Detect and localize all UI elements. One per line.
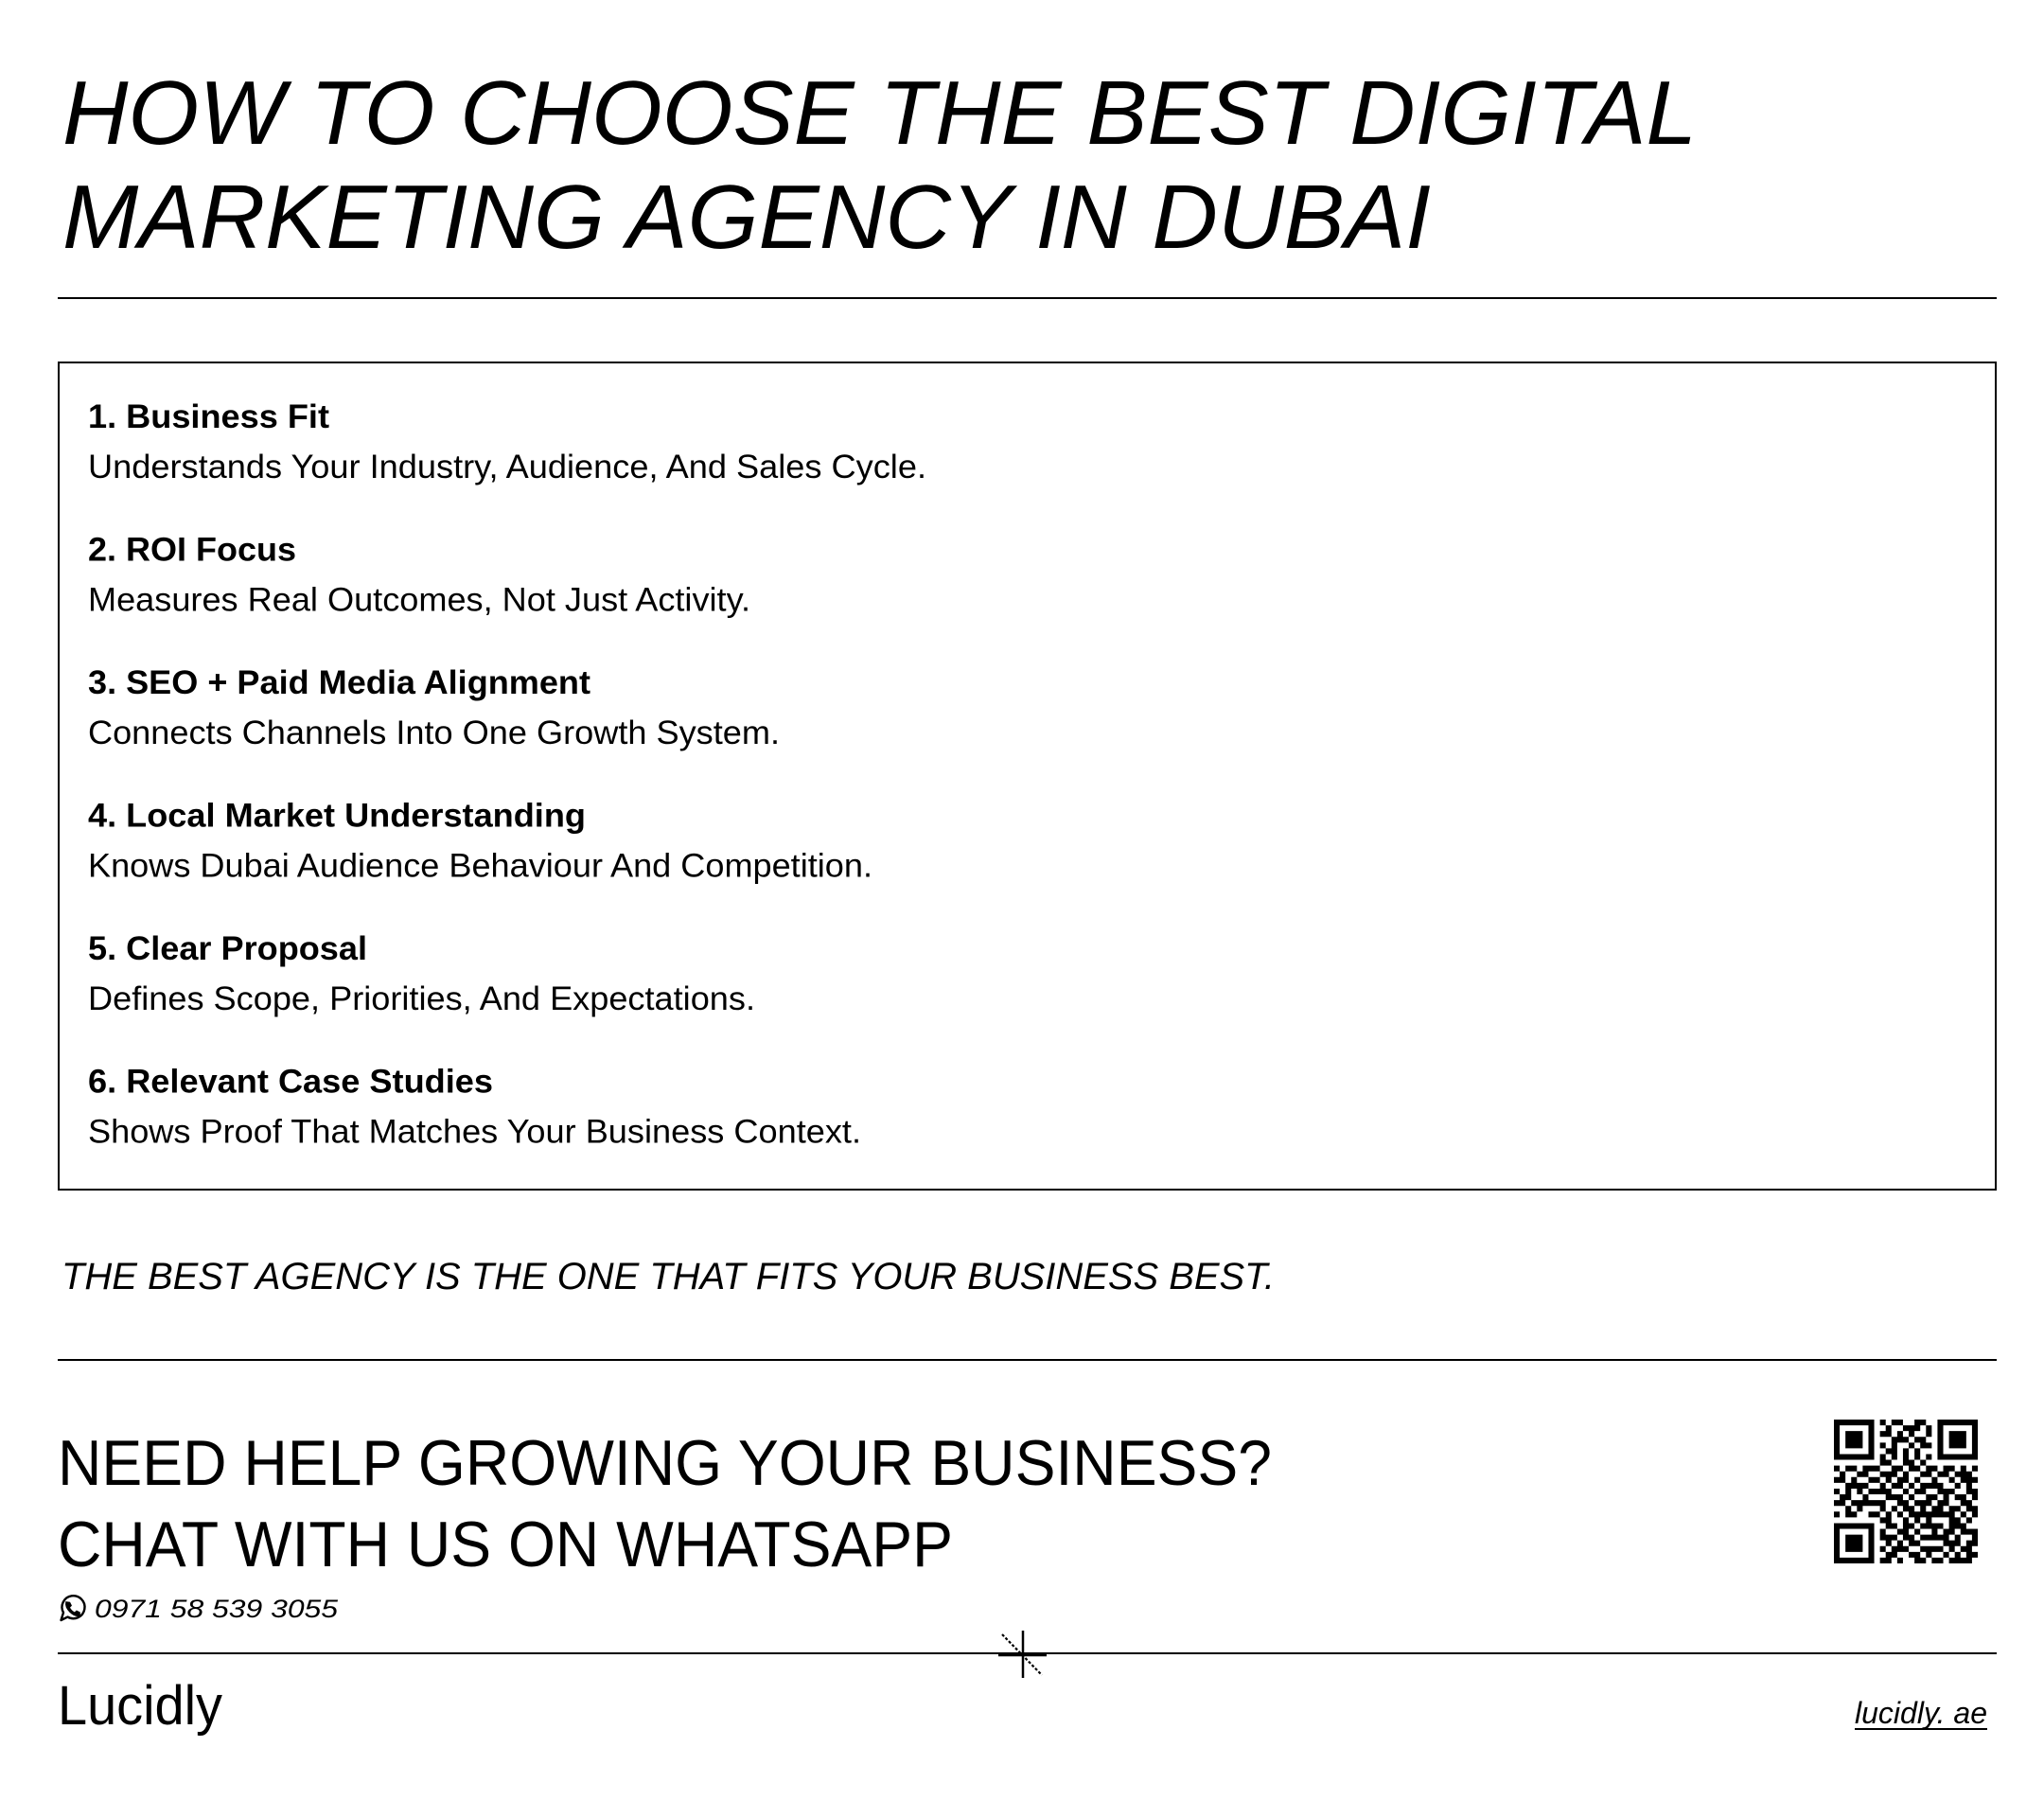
item 3: 3. SEO + Paid Media Alignment <box>88 664 590 701</box>
item 6: Shows Proof That Matches Your Business Context. <box>88 1113 861 1151</box>
item 6: 6. Relevant Case Studies <box>88 1064 493 1100</box>
item 4 <box>88 797 872 884</box>
title: HOW TO CHOOSE THE BEST DIGITAL <box>62 62 1697 164</box>
item 3 <box>88 664 780 751</box>
title: MARKETING AGENCY IN DUBAI <box>62 167 1431 268</box>
item 2: Measures Real Outcomes, Not Just Activity. <box>88 581 750 619</box>
title <box>62 62 1697 268</box>
item 5: 5. Clear Proposal <box>88 930 367 967</box>
phone contact: 0971 58 539 3055 <box>95 1595 339 1623</box>
qr code <box>1834 1422 1978 1561</box>
item 1: 1. Business Fit <box>88 398 329 435</box>
item 2 <box>88 532 750 619</box>
item 4: 4. Local Market Understanding <box>88 797 586 835</box>
item 1 <box>88 398 926 485</box>
call to action <box>58 1427 1272 1580</box>
call to action: NEED HELP GROWING YOUR BUSINESS? <box>58 1427 1272 1499</box>
item 2: 2. ROI Focus <box>88 532 296 568</box>
item 5 <box>88 930 755 1017</box>
icon: whatsapp <box>61 1596 85 1620</box>
logo: Lucidly: Lucidly <box>58 1675 222 1737</box>
panel: criteria list <box>59 362 1996 1190</box>
item 4: Knows Dubai Audience Behaviour And Competition. <box>88 848 872 884</box>
call to action: CHAT WITH US ON WHATSAPP <box>58 1509 953 1580</box>
icon: star cross <box>998 1631 1047 1678</box>
item 6 <box>88 1064 861 1151</box>
item 1: Understands Your Industry, Audience, And Sales Cycle. <box>88 449 926 485</box>
website link: lucidly. ae <box>1855 1696 1987 1730</box>
tagline: THE BEST AGENCY IS THE ONE THAT FITS YOUR BUSINESS BEST. <box>62 1256 1275 1297</box>
item 5: Defines Scope, Priorities, And Expectations. <box>88 980 755 1017</box>
item 3: Connects Channels Into One Growth System. <box>88 715 780 751</box>
